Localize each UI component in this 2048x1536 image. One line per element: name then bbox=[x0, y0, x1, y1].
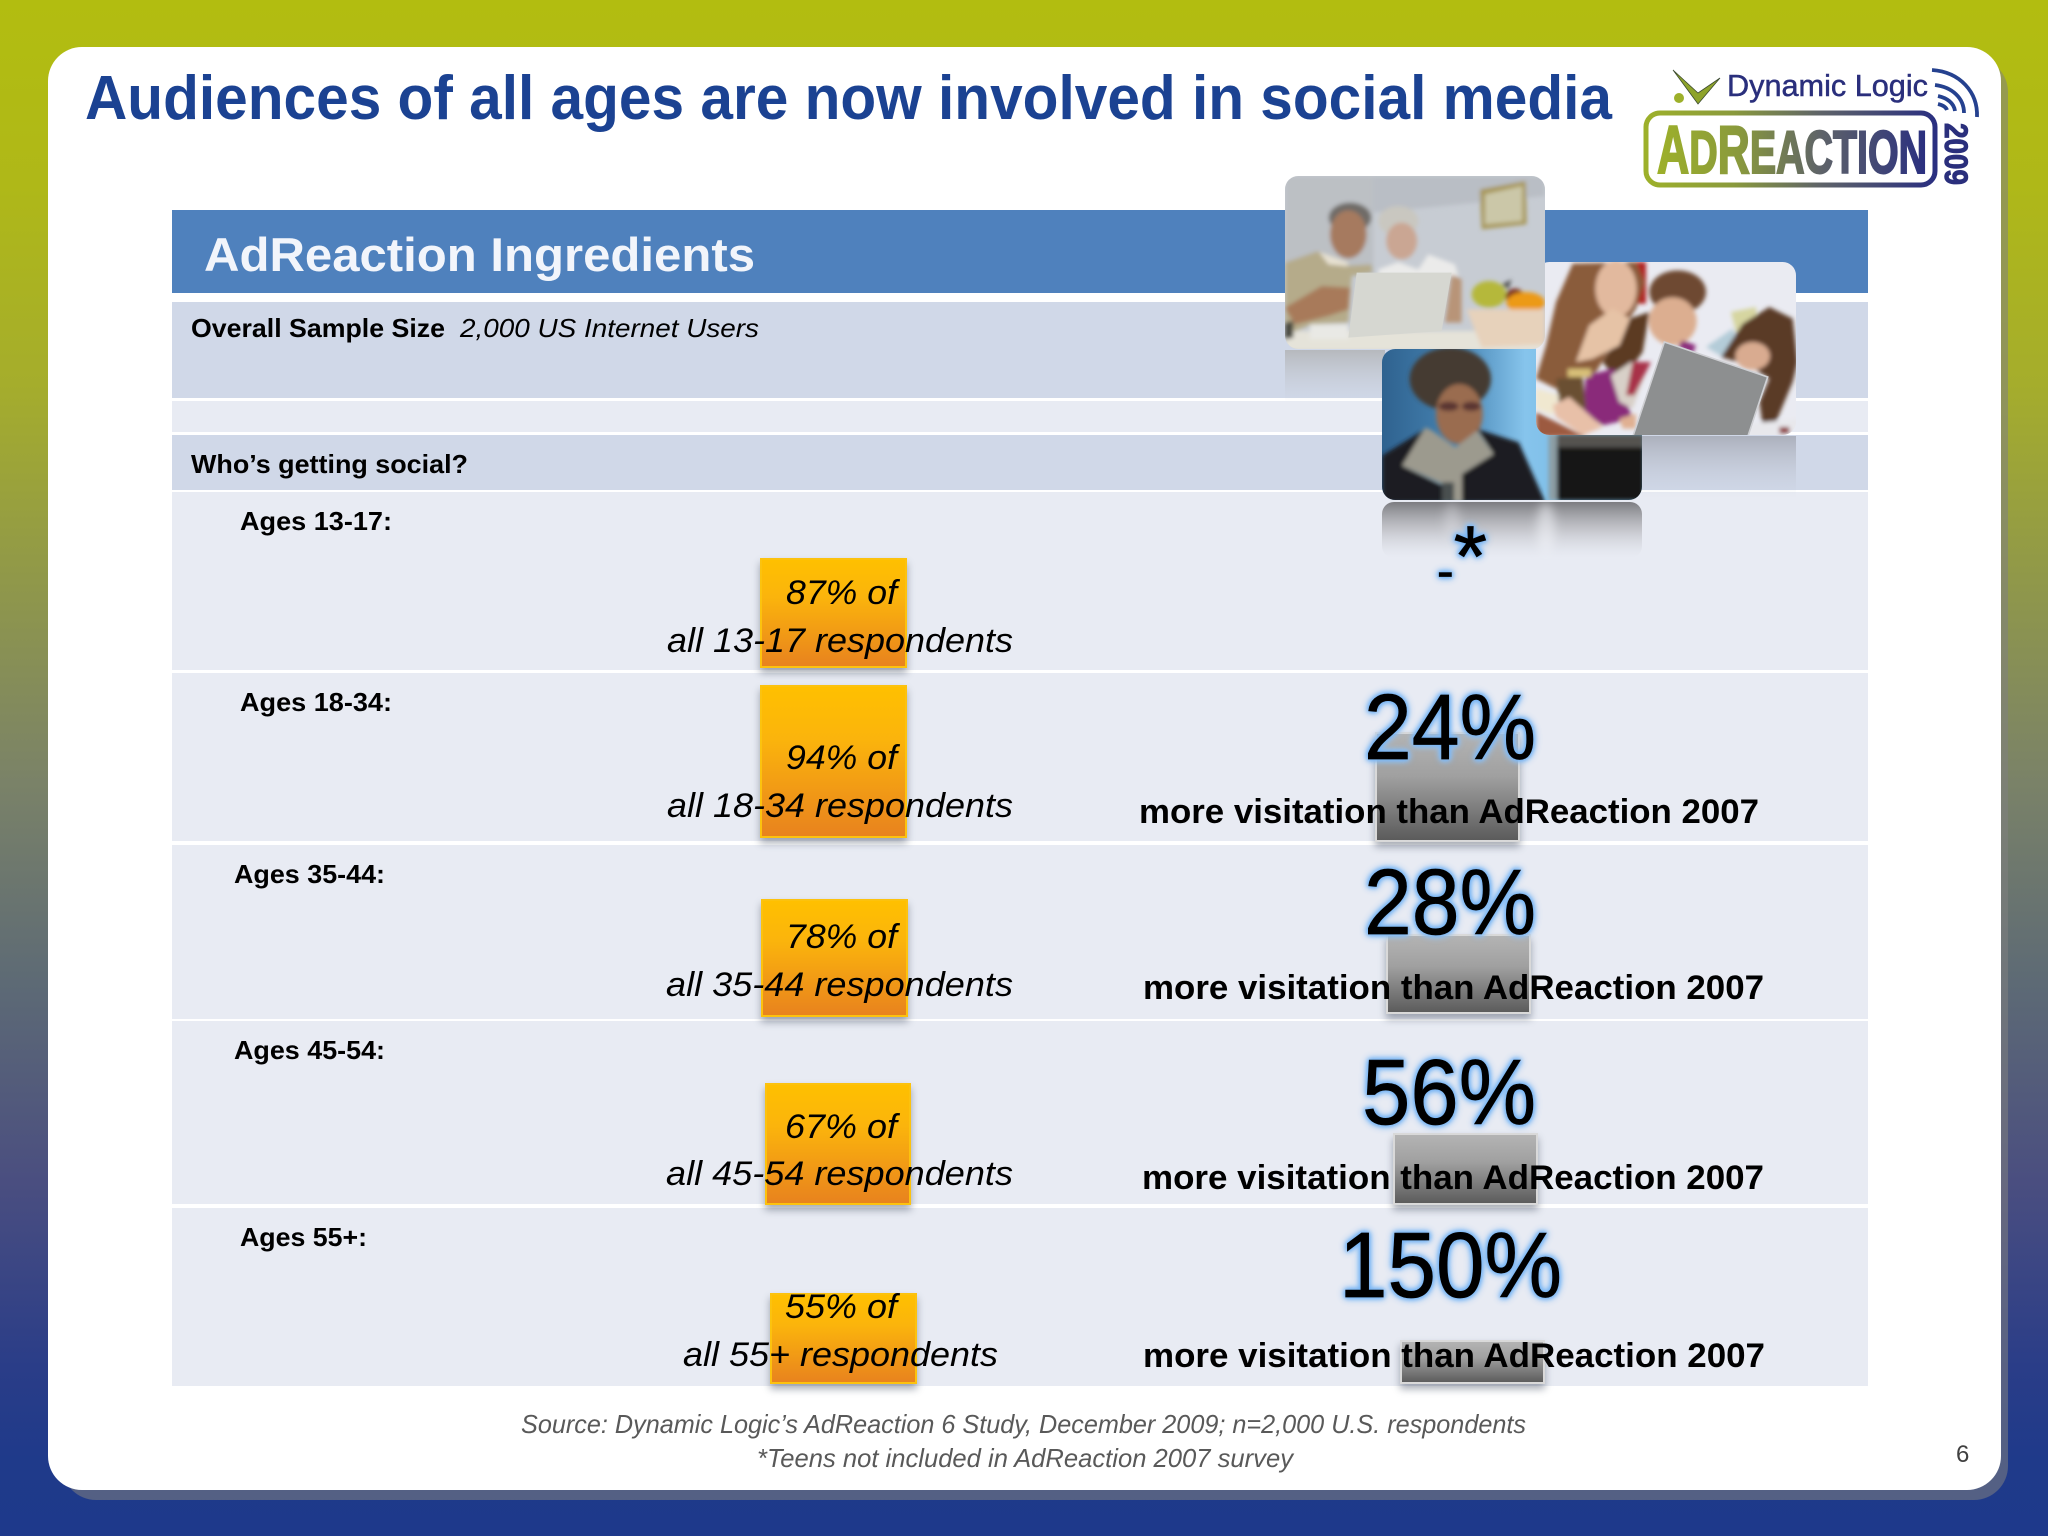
row: sample size bbox=[172, 302, 1868, 398]
share of respondents: all 13-17 respondents bbox=[667, 622, 1013, 660]
label: Ages 35-44: bbox=[234, 859, 385, 889]
footnote: *Teens not included in AdReaction 2007 survey bbox=[757, 1443, 1295, 1473]
photo: three girls with laptop bbox=[1536, 260, 1799, 437]
laptop lid bbox=[1348, 273, 1452, 338]
share of respondents: 55% of bbox=[785, 1288, 901, 1326]
growth figure: 56% bbox=[1362, 1040, 1536, 1144]
logo badge frame bbox=[1646, 113, 1935, 185]
logo signal arcs bbox=[1932, 70, 1977, 117]
sample size label: Overall Sample Size bbox=[191, 313, 445, 343]
photo: seniors with laptop bbox=[1285, 176, 1545, 351]
row: who's getting social bbox=[172, 435, 1868, 490]
gray bar bbox=[1394, 1134, 1537, 1204]
label: Ages 45-54: bbox=[234, 1035, 385, 1065]
group: ages 13-17 bbox=[240, 506, 1487, 667]
share of respondents: 94% of bbox=[786, 739, 901, 777]
share of respondents bbox=[667, 739, 1013, 825]
share of respondents: 67% of bbox=[785, 1108, 901, 1146]
share of respondents: 87% of bbox=[786, 574, 901, 612]
label: Ages 13-17: bbox=[240, 506, 392, 536]
laptop lid bbox=[1633, 342, 1768, 437]
share of respondents bbox=[683, 1288, 998, 1374]
dash asterisk: * bbox=[1454, 509, 1487, 605]
growth caption: more visitation than AdReaction 2007 bbox=[1143, 969, 1764, 1007]
gray bar bbox=[1376, 733, 1519, 841]
group: ages 35-44 bbox=[234, 850, 1764, 1016]
growth caption: more visitation than AdReaction 2007 bbox=[1139, 793, 1759, 831]
orange bar bbox=[761, 686, 906, 837]
row: ages 55+ bbox=[172, 1208, 1868, 1386]
photo: professional woman bbox=[1382, 347, 1644, 502]
growth caption: more visitation than AdReaction 2007 bbox=[1143, 1337, 1765, 1375]
sample size value: 2,000 US Internet Users bbox=[459, 313, 759, 343]
logo AdReaction: ADREACTION bbox=[1657, 112, 1927, 188]
orange bar bbox=[766, 1084, 910, 1204]
share of respondents: 78% of bbox=[786, 918, 901, 956]
share of respondents: all 45-54 respondents bbox=[666, 1155, 1013, 1193]
dash asterisk: - bbox=[1437, 543, 1454, 599]
group: ages 45-54 bbox=[234, 1035, 1764, 1204]
table: AdReaction Ingredients bbox=[172, 210, 1868, 1386]
growth figure: 150% bbox=[1339, 1213, 1562, 1317]
group: ages 18-34 bbox=[240, 675, 1759, 841]
row: ages 45-54 bbox=[172, 1021, 1868, 1204]
row: ages 13-17 bbox=[172, 492, 1868, 670]
growth caption: more visitation than AdReaction 2007 bbox=[1142, 1159, 1764, 1197]
group: ages 55+ bbox=[240, 1213, 1765, 1383]
logo wordmark: Dynamic Logic bbox=[1727, 68, 1928, 103]
row: ages 35-44 bbox=[172, 845, 1868, 1019]
share of respondents: all 18-34 respondents bbox=[667, 787, 1013, 825]
orange bar bbox=[762, 900, 907, 1016]
section label: Who’s getting social? bbox=[191, 449, 468, 479]
table header bar bbox=[172, 210, 1868, 293]
row: ages 18-34 bbox=[172, 673, 1868, 841]
growth figure: 24% bbox=[1364, 675, 1536, 779]
table heading: AdReaction Ingredients bbox=[204, 228, 755, 281]
gray bar bbox=[1387, 935, 1530, 1013]
orange bar bbox=[761, 559, 906, 667]
page number: 6 bbox=[1956, 1441, 1969, 1468]
source note: Source: Dynamic Logic’s AdReaction 6 Study, December 2009; n=2,000 U.S. respondents bbox=[521, 1409, 1526, 1439]
orange bar bbox=[771, 1294, 916, 1383]
share of respondents: all 35-44 respondents bbox=[666, 966, 1013, 1004]
logo year: 2009 bbox=[1938, 123, 1974, 185]
title: Audiences of all ages are now involved in social media bbox=[85, 64, 1612, 133]
share of respondents bbox=[666, 918, 1013, 1004]
growth figure: 28% bbox=[1364, 850, 1536, 954]
logo: Dynamic Logic AdReaction 2009 bbox=[1646, 68, 1977, 188]
label: Ages 55+: bbox=[240, 1222, 367, 1252]
share of respondents: all 55+ respondents bbox=[683, 1336, 998, 1374]
share of respondents bbox=[666, 1108, 1013, 1193]
row: spacer bbox=[172, 401, 1868, 432]
gray bar bbox=[1401, 1341, 1544, 1383]
photo reflections bbox=[1285, 350, 1796, 558]
logo checkmark bbox=[1673, 70, 1720, 104]
label: Ages 18-34: bbox=[240, 687, 392, 717]
share of respondents bbox=[667, 574, 1013, 660]
